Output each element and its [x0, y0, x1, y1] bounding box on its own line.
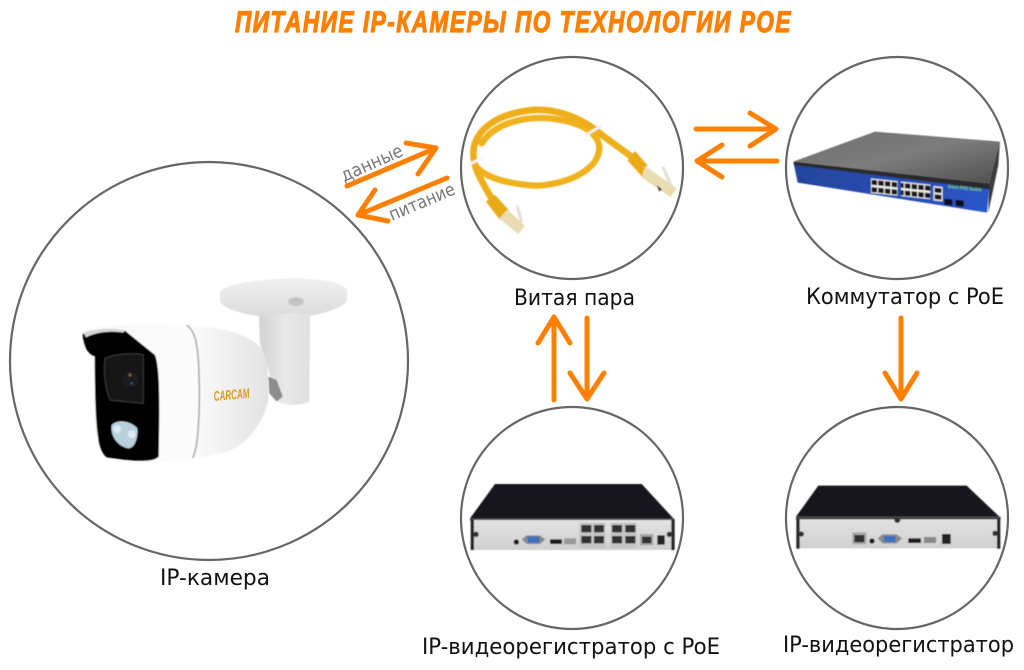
panel: NVR: [786, 407, 1008, 629]
icon: NVR with PoE ports: [470, 484, 675, 550]
arrow: cable down to NVR: [570, 318, 604, 399]
arrow: power to camera: [358, 178, 447, 221]
panel: PoE switch: [786, 57, 1008, 279]
panel: NVR with PoE: [461, 407, 683, 629]
icon: NVR: [796, 486, 1001, 549]
arrow: NVR up to cable: [538, 317, 570, 400]
label: power: питание: [386, 179, 458, 226]
label: IP camera: IP-камера: [160, 566, 270, 591]
label: PoE switch: Коммутатор с PoE: [806, 285, 1004, 310]
arrow: cable to switch: [696, 113, 776, 146]
icon: PoE switch: [793, 132, 1000, 213]
panel: IP camera: [10, 162, 408, 560]
arrow: data to cable: [347, 143, 436, 186]
title: ПИТАНИЕ IP-КАМЕРЫ ПО ТЕХНОЛОГИИ POE: [235, 6, 792, 39]
label: data: данные: [337, 141, 406, 187]
switch model text: Smart POE Switch: [947, 184, 982, 194]
label: NVR: IP-видеорегистратор: [783, 633, 1014, 658]
arrow: switch to cable: [697, 145, 777, 177]
arrow: switch down to NVR: [885, 318, 917, 399]
panel: twisted pair: [461, 57, 683, 279]
icon: yellow patch cable: [470, 110, 677, 234]
label: twisted pair: Витая пара: [514, 286, 635, 311]
icon: camera photo: [83, 279, 347, 462]
label: NVR with PoE: IP-видеорегистратор с PoE: [422, 635, 720, 660]
camera brand mark: CARCAM: [213, 385, 250, 404]
